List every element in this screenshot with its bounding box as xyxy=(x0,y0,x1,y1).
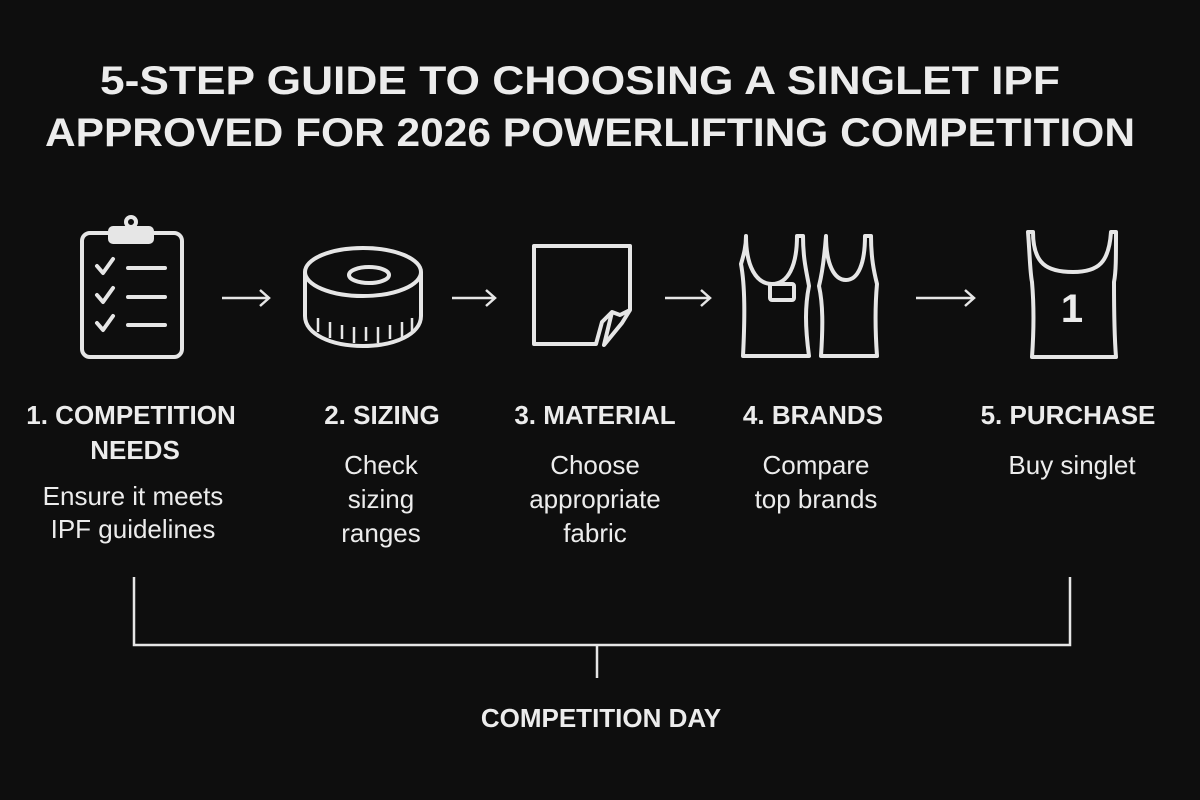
step 3 text xyxy=(514,400,676,548)
step 4 text xyxy=(743,400,883,514)
step 4 text: top brands xyxy=(755,484,877,514)
step 4 text: 4. BRANDS xyxy=(743,400,883,430)
icon: clipboard xyxy=(82,217,182,357)
competition day label: COMPETITION DAY xyxy=(481,703,721,733)
title: APPROVED FOR 2026 POWERLIFTING COMPETITION xyxy=(45,111,1135,155)
step 3 text: Choose xyxy=(550,450,640,480)
title: 5-STEP GUIDE TO CHOOSING A SINGLET IPF xyxy=(100,59,1060,103)
step 2 text: ranges xyxy=(341,518,421,548)
step 2 text: sizing xyxy=(348,484,414,514)
icon: measuring tape xyxy=(305,248,421,346)
step 1 text: NEEDS xyxy=(90,435,180,465)
step 5 text: 5. PURCHASE xyxy=(981,400,1155,430)
icon: singlet number 1 xyxy=(1028,232,1116,357)
step 2 text xyxy=(324,400,440,548)
step 3 text: fabric xyxy=(563,518,627,548)
step 5 text: Buy singlet xyxy=(1008,450,1136,480)
step 1 text: 1. COMPETITION xyxy=(26,400,236,430)
step 1 text: IPF guidelines xyxy=(51,514,215,544)
step 3 text: appropriate xyxy=(529,484,661,514)
icon: singlet number 1: 1 xyxy=(1061,287,1083,331)
icon: fabric xyxy=(534,246,630,345)
step 3 text: 3. MATERIAL xyxy=(514,400,676,430)
step 1 text xyxy=(26,400,236,544)
arrow 1 xyxy=(222,290,269,306)
title xyxy=(45,59,1135,155)
arrow 4 xyxy=(916,290,974,306)
icon: two singlets xyxy=(741,236,877,356)
step 2 text: 2. SIZING xyxy=(324,400,440,430)
step 5 text xyxy=(981,400,1155,480)
step 2 text: Check xyxy=(344,450,419,480)
bracket xyxy=(134,577,1070,678)
arrow 3 xyxy=(665,290,710,306)
arrow 2 xyxy=(452,290,495,306)
step 1 text: Ensure it meets xyxy=(43,481,223,511)
step 4 text: Compare xyxy=(763,450,869,480)
